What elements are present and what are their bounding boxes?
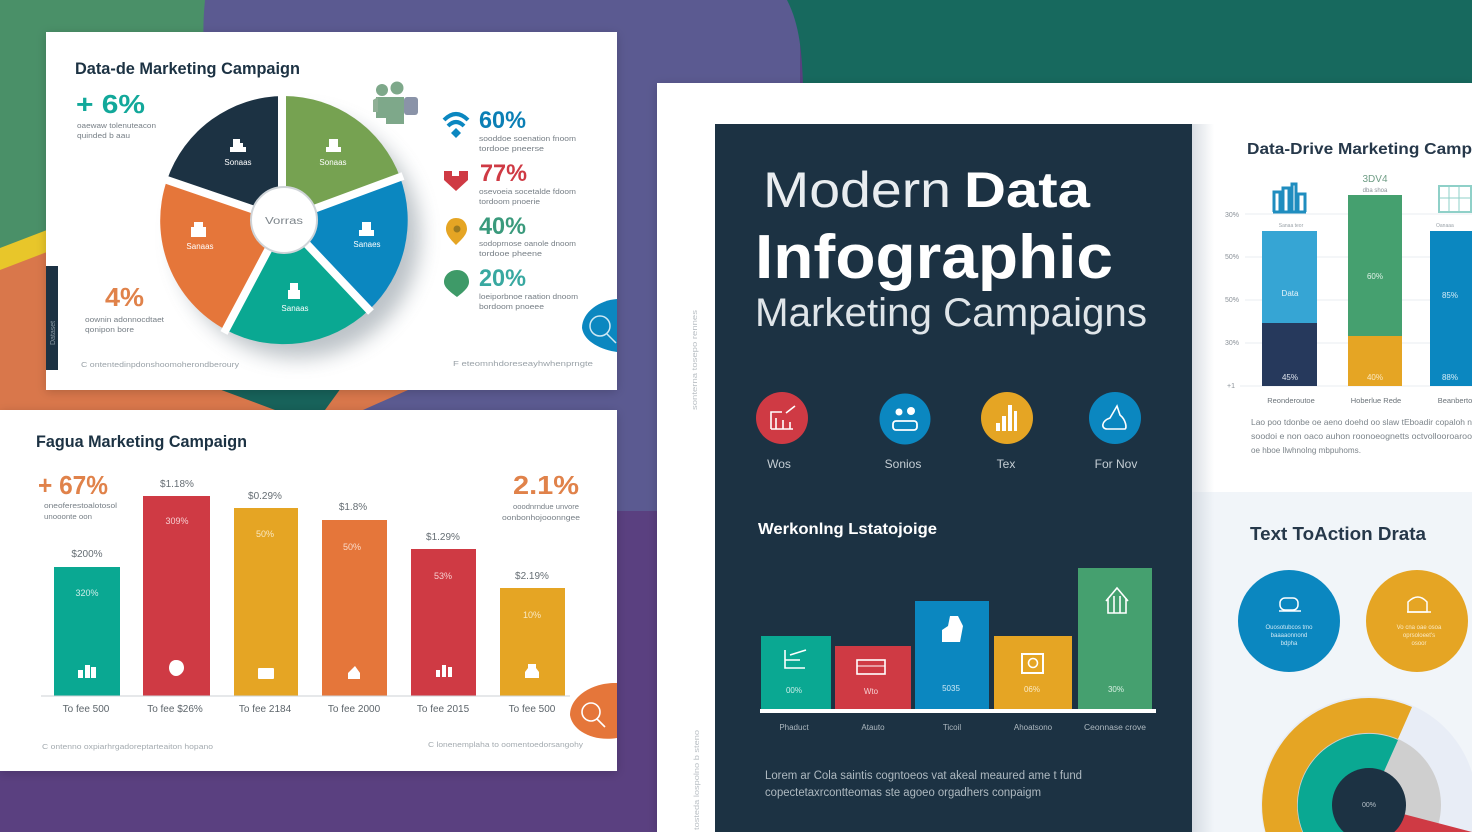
icon: people <box>373 82 418 124</box>
bar group 3: Oanaaa <box>1436 223 1454 229</box>
bar 5 <box>411 532 476 696</box>
bar 1: 320% <box>75 588 99 598</box>
stat: 60 percent: tordooe pneerse <box>479 144 544 153</box>
stat: 20 percent <box>444 265 578 311</box>
bar 4: $1.8% <box>339 502 367 513</box>
vertical margin notes <box>692 309 701 830</box>
description <box>1251 417 1472 455</box>
stat: 20 percent: 20% <box>479 265 526 292</box>
slice labels <box>186 139 381 313</box>
bar 2 <box>835 646 911 709</box>
stat: plus 6 percent: + 6% <box>76 89 145 119</box>
category labels: Ceonnase crove <box>1084 723 1147 732</box>
heading: Fagua Marketing Campaign <box>36 432 247 451</box>
blue circle callout: baaaaonnond <box>1271 633 1307 639</box>
bar 2: $1.18% <box>160 479 194 490</box>
bar group 2: dba shoa <box>1363 188 1388 194</box>
bar 3: 5035 <box>942 684 960 693</box>
stat: 2.1 percent: 2.1% <box>513 470 579 500</box>
axis labels: To fee 2000 <box>328 704 381 715</box>
gridlines and y labels: 30% <box>1225 212 1239 219</box>
bar group 1 <box>1262 184 1317 386</box>
title: Marketing Campaigns <box>755 291 1147 335</box>
bar group 2: 60% <box>1367 272 1383 281</box>
slice: teal <box>226 220 369 344</box>
bar 4: 06% <box>1024 685 1040 694</box>
footers <box>42 740 583 751</box>
stat: 40 percent: 40% <box>479 213 526 240</box>
title: Infographic <box>755 223 1113 292</box>
gridlines and y labels: +1 <box>1227 383 1235 390</box>
stat: 4 percent: oownin adonnocdtaet <box>85 315 165 324</box>
footers: C lonenemplaha to oomentoedorsangohy <box>428 740 583 749</box>
axis labels: To fee 2015 <box>417 704 470 715</box>
poster bar chart <box>760 568 1156 732</box>
amber circle callout <box>1366 570 1468 672</box>
bar 4: 50% <box>343 542 361 552</box>
gridlines and y labels: 50% <box>1225 254 1239 261</box>
heading: Data-de Marketing Campaign <box>75 59 300 78</box>
stat: 77 percent: 77% <box>480 160 527 187</box>
axis labels: To fee 500 <box>509 704 556 715</box>
stat: plus 67 percent: oneoferestoalotosol <box>44 501 117 510</box>
bar group 2: 3DV4 <box>1362 174 1388 185</box>
stat: 2.1 percent <box>502 470 580 522</box>
panel: right page <box>657 83 1472 832</box>
donut chart: 00% <box>1362 802 1376 809</box>
bar group 1: Data <box>1282 289 1299 298</box>
stats list <box>444 107 578 311</box>
heading: Data-Drive Marketing Camp <box>1247 141 1472 158</box>
bar 4 <box>322 502 387 696</box>
panel: bar chart campaign <box>0 410 617 771</box>
hub: Vorras <box>265 216 303 227</box>
slice labels: Sonaas <box>224 158 252 167</box>
bar 1 <box>54 549 120 696</box>
category labels: Ahoatsono <box>1014 723 1053 732</box>
stat: plus 6 percent <box>76 89 156 140</box>
hub <box>251 187 317 253</box>
bar 4 <box>994 636 1072 709</box>
bar 3: $0.29% <box>248 491 282 502</box>
stat: 77 percent: tordoom pnoerie <box>479 197 540 206</box>
bar 1: 00% <box>786 686 802 695</box>
gridlines and y labels: 30% <box>1225 340 1239 347</box>
stat: 2.1 percent: ooodnrndue unvore <box>513 502 579 511</box>
bar group 3 <box>1430 186 1472 386</box>
bar 6 <box>500 571 565 696</box>
slice labels: Sanaes <box>353 240 381 249</box>
bar group 1: 45% <box>1282 373 1298 382</box>
description: soodoi e non oaco auhon roonoeognetts octvollooroaroo <box>1251 431 1472 441</box>
bar 2: 309% <box>165 516 189 526</box>
bar 3: 50% <box>256 529 274 539</box>
bar 6: $2.19% <box>515 571 549 582</box>
icon: amber circle <box>981 392 1033 471</box>
axis <box>41 695 570 697</box>
title <box>755 162 1147 335</box>
gridlines and y labels <box>1225 212 1472 390</box>
amber circle callout: Vo cna oae osoa <box>1397 625 1442 631</box>
icon: blue circle <box>880 394 930 471</box>
bar 3 <box>234 491 298 696</box>
slice: blue <box>284 177 408 310</box>
stat: 60 percent: 60% <box>479 107 526 134</box>
footers: F eteomnhdoreseayhwhenprngte <box>453 359 593 368</box>
icon: blue circle: Sonios <box>885 457 921 471</box>
vertical margin notes: tosteda lospolno b steno <box>694 730 701 830</box>
bar group 3: 88% <box>1442 373 1458 382</box>
icon row <box>756 392 1141 471</box>
slice: navy <box>167 96 284 220</box>
bar 5: 53% <box>434 571 452 581</box>
corner icon: magnifier blob <box>582 299 617 352</box>
icon: teal-blue circle: For Nov <box>1095 457 1137 471</box>
subheading: Werkonlng Lstatojoige <box>758 521 937 538</box>
body copy: copectetaxrcontteomas ste agoeo orgadhers conpaigm <box>765 787 1041 799</box>
axis labels: Hoberlue Rede <box>1351 396 1401 405</box>
axis labels <box>1267 396 1472 405</box>
bar group 2 <box>1348 174 1402 386</box>
bar 5: 30% <box>1108 685 1124 694</box>
stat: 4 percent: 4% <box>105 282 144 312</box>
axis labels: To fee 2184 <box>239 704 292 715</box>
footers <box>81 359 593 369</box>
stat: 77 percent: osevoeia socetalde fdoom <box>479 187 576 196</box>
title: Data <box>964 162 1091 218</box>
stat: 40 percent: tordooe pheene <box>479 249 542 258</box>
bar 2 <box>143 479 210 696</box>
axis labels: To fee 500 <box>63 704 110 715</box>
panel: marketing campaign pie chart <box>46 32 617 390</box>
slice labels: Sonaas <box>319 158 347 167</box>
stat: 60 percent <box>444 107 576 153</box>
bar group 3: 85% <box>1442 291 1458 300</box>
vertical margin notes: sonterna tosepo rennes <box>692 309 699 410</box>
stat: 77 percent <box>444 160 576 206</box>
baseline <box>760 709 1156 713</box>
stat: plus 6 percent: quinded b aau <box>77 131 130 140</box>
stat: 60 percent: sooddoe soenation fnoom <box>479 134 576 143</box>
category labels <box>779 723 1147 732</box>
bar 3 <box>915 601 989 709</box>
icon: red circle <box>756 392 808 471</box>
navy side tab <box>46 266 58 370</box>
axis labels: Beanberto <box>1438 396 1472 405</box>
navy side tab: Dataset <box>50 321 57 345</box>
bar 5 <box>1078 568 1152 709</box>
description: Lao poo tdonbe oe aeno doehd oo slaw tEboadir copaloh n <box>1251 417 1472 427</box>
slice: orange <box>160 180 284 330</box>
panel: navy poster <box>715 124 1192 832</box>
title: Modern <box>763 162 951 218</box>
axis labels <box>63 704 556 715</box>
donut chart <box>1261 696 1472 832</box>
slice labels: Sanaas <box>281 304 309 313</box>
axis labels: To fee $26% <box>147 704 203 715</box>
stat: 2.1 percent: oonbonhojooonngee <box>502 513 580 522</box>
blue circle callout: Ouosotubcos tmo <box>1265 625 1313 631</box>
bar 5: $1.29% <box>426 532 460 543</box>
panel: right stacked chart <box>1225 141 1472 455</box>
pie chart <box>160 92 420 358</box>
icon: red circle: Wos <box>767 457 791 471</box>
category labels: Phaduct <box>779 723 809 732</box>
bar group 1: Sanaa teor <box>1279 223 1304 229</box>
bar 1: $200% <box>71 549 103 560</box>
corner icon: orange magnifier blob <box>570 683 617 739</box>
footers: C ontentedinpdonshoomoherondberoury <box>81 360 239 369</box>
axis labels: Reonderoutoe <box>1267 396 1315 405</box>
stat: 40 percent: sodoprnose oanole dnoom <box>479 239 576 248</box>
bar 2: Wto <box>864 687 879 696</box>
stat: plus 67 percent: unooonte oon <box>44 512 92 521</box>
bars <box>41 479 570 696</box>
category labels: Ticoil <box>943 723 961 732</box>
panel: text to action <box>1238 524 1472 832</box>
blue circle callout: bdpha <box>1281 641 1298 647</box>
icon: amber circle: Tex <box>997 457 1015 471</box>
stat: 4 percent: qonipon bore <box>85 325 134 334</box>
stat: plus 67 percent: + 67% <box>38 470 108 500</box>
body copy <box>765 770 1082 799</box>
amber circle callout: oprsoloeet's <box>1403 633 1435 639</box>
category labels: Atauto <box>861 723 885 732</box>
bar 6: 10% <box>523 610 541 620</box>
gridlines and y labels: 50% <box>1225 297 1239 304</box>
icon: teal-blue circle <box>1089 392 1141 471</box>
footers: C ontenno oxpiarhrgadoreptarteaiton hopano <box>42 742 213 751</box>
body copy: Lorem ar Cola saintis cogntoeos vat akeal meaured ame t fund <box>765 770 1082 782</box>
description: oe hboe llwhnolng mbpuhoms. <box>1251 445 1361 455</box>
slice labels: Sanaas <box>186 242 214 251</box>
stat: plus 67 percent <box>38 470 117 521</box>
stat: plus 6 percent: oaewaw tolenuteacon <box>77 121 156 130</box>
stat: 40 percent <box>446 213 576 258</box>
bar 1 <box>761 636 831 709</box>
bar group 2: 40% <box>1367 373 1383 382</box>
blue circle callout <box>1238 570 1340 672</box>
stat: 20 percent: bordoom pnoeee <box>479 302 544 311</box>
slice: green <box>284 96 400 220</box>
stat: 20 percent: loeiporbnoe raation dnoom <box>479 292 578 301</box>
stat: 4 percent <box>85 282 165 334</box>
amber circle callout: osoor <box>1411 641 1427 647</box>
heading: Text ToAction Drata <box>1250 524 1427 544</box>
